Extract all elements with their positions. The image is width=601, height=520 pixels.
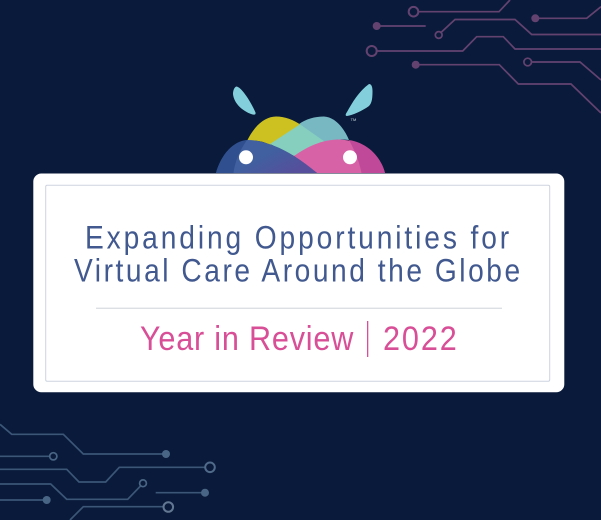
- circuit lines: top right: [367, 0, 601, 113]
- subtitle: Year in Review: [140, 320, 354, 357]
- subtitle separator: [367, 321, 368, 357]
- divider: [96, 308, 502, 309]
- card inner frame: [46, 185, 550, 381]
- subtitle: 2022: [383, 320, 457, 357]
- title: Expanding Opportunities for: [85, 221, 509, 256]
- icon: right eye: [343, 150, 357, 164]
- circuit lines: bottom left: [0, 424, 215, 520]
- title: Virtual Care Around the Globe: [74, 254, 520, 289]
- icon: dark pink edge: [349, 140, 385, 173]
- icon: right ear: [346, 84, 372, 116]
- card outer panel: [33, 174, 564, 392]
- icon: yellow lobe: [247, 116, 301, 145]
- icon: pink lobe: [294, 139, 385, 173]
- logo: [216, 84, 385, 173]
- icon: teal lobe: [299, 116, 349, 144]
- icon: mint overlap: [270, 124, 327, 156]
- icon: blue lobe: [216, 140, 317, 173]
- icon: left eye: [239, 150, 253, 164]
- title: [74, 221, 520, 289]
- icon: left ear: [233, 86, 256, 115]
- card: [33, 174, 564, 392]
- trademark mark: TM: [351, 117, 356, 122]
- subtitle: [140, 320, 457, 357]
- icon: dark blue edge: [216, 140, 247, 173]
